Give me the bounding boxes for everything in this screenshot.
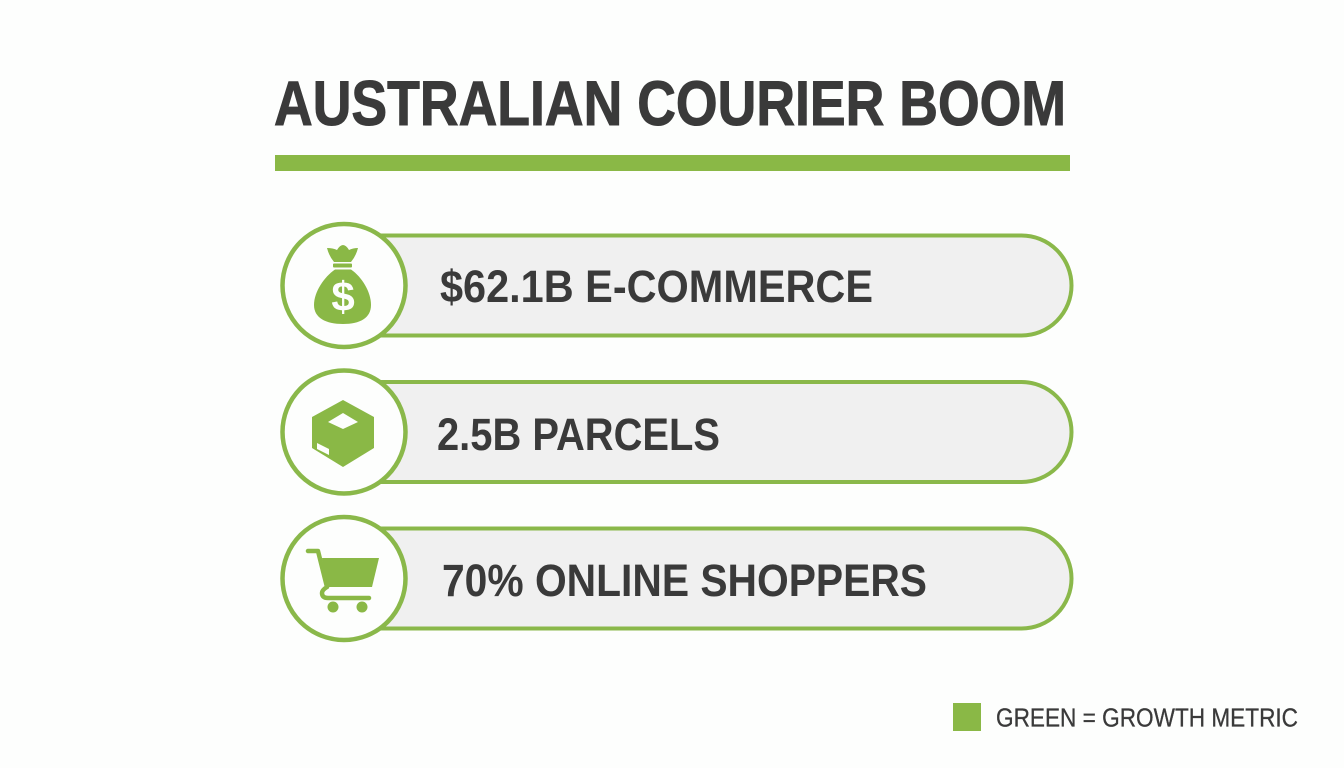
row 3: online shoppers <box>282 517 1072 640</box>
metric text: online shoppers: 70% ONLINE SHOPPERS <box>442 555 927 606</box>
row 2: parcels <box>282 370 1072 494</box>
icon: parcel box <box>282 370 406 494</box>
icon: money bag: $ <box>331 273 355 320</box>
pill: parcels <box>330 382 1072 482</box>
icon: shopping cart <box>282 517 406 640</box>
metric text: e-commerce: $62.1B E-COMMERCE <box>440 261 873 312</box>
row 1: e-commerce <box>282 224 1072 347</box>
title underline bar <box>275 155 1070 171</box>
metric text: parcels: 2.5B PARCELS <box>437 409 720 460</box>
pill: online shoppers <box>330 528 1072 628</box>
pill: e-commerce <box>330 236 1072 336</box>
icon: money bag <box>282 224 406 347</box>
legend swatch <box>953 703 981 731</box>
legend <box>953 702 1298 732</box>
title: AUSTRALIAN COURIER BOOM <box>274 69 1066 139</box>
legend label: GREEN = GROWTH METRIC <box>996 702 1298 732</box>
